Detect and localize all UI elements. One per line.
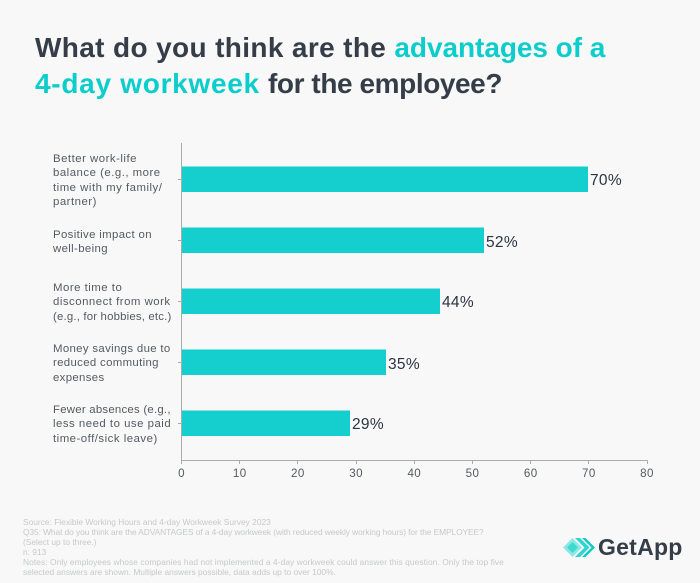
axis tick labels: 40 [407, 467, 421, 480]
value labels: 52% [486, 234, 518, 251]
footnote: Q35: What do you think are the ADVANTAGES of a 4-day workweek (with reduced weekly working hours) for the EMPLOYEE? [23, 527, 484, 537]
label: money savings: reduced commuting [53, 357, 159, 369]
value labels: 29% [352, 416, 384, 433]
label: well-being [53, 229, 152, 255]
footnote: Notes: Only employees whose companies had not implemented a 4-day workweek could answer this question. Only the top five [23, 557, 504, 567]
axis tick labels: 70 [582, 467, 596, 480]
axes [178, 143, 648, 464]
axis tick labels: 20 [291, 467, 305, 480]
value labels: 35% [388, 356, 420, 373]
logo wordmark: GetApp [598, 534, 683, 560]
axis tick labels: 80 [640, 467, 654, 480]
label: disconnect: (e.g., for hobbies, etc.) [53, 311, 171, 323]
label: money savings [53, 343, 171, 384]
title [35, 32, 606, 99]
title: What do you think are the advantages of a [35, 32, 605, 63]
label: fewer absences [53, 404, 171, 445]
logo: GetApp [563, 534, 683, 560]
title: 4-day workweek for the employee? [35, 68, 502, 99]
value labels [352, 172, 622, 433]
footnote [23, 517, 504, 577]
label: money savings: expenses [53, 372, 104, 384]
bars [182, 166, 588, 436]
label: work-life balance: balance (e.g., more [53, 167, 161, 179]
axis tick labels: 30 [349, 467, 363, 480]
footnote: selected answers are shown. Multiple answers possible, data adds up to over 100%. [23, 567, 336, 577]
label: work-life balance: time with my family/ [53, 182, 162, 194]
value labels: 70% [590, 172, 622, 189]
label: fewer absences: less need to use paid [53, 418, 171, 430]
label: work-life balance [53, 153, 162, 208]
label: work-life balance: partner) [53, 196, 97, 208]
axis tick labels: 0 [178, 467, 185, 480]
label: fewer absences: time-off/sick leave) [53, 433, 158, 445]
value labels: 44% [442, 294, 474, 311]
icon: chevrons [563, 538, 595, 557]
category labels [53, 153, 171, 445]
footnote: n: 913 [23, 547, 46, 557]
label: disconnect [53, 282, 171, 323]
axis tick labels: 50 [466, 467, 479, 480]
axis tick labels: 60 [524, 467, 538, 480]
axis tick labels: 10 [233, 467, 247, 480]
axis tick labels [178, 467, 654, 480]
footnote: Source: Flexible Working Hours and 4-day Workweek Survey 2023 [23, 517, 271, 527]
label: disconnect: disconnect from work [53, 296, 171, 308]
label: well-being: Positive impact on [53, 229, 152, 241]
footnote: (Select up to three.) [23, 537, 97, 547]
label: fewer absences: Fewer absences (e.g., [53, 404, 171, 416]
label: disconnect: More time to [53, 282, 122, 294]
label: well-being: well-being [53, 243, 108, 255]
label: work-life balance: Better work-life [53, 153, 137, 165]
label: money savings: Money savings due to [53, 343, 171, 355]
